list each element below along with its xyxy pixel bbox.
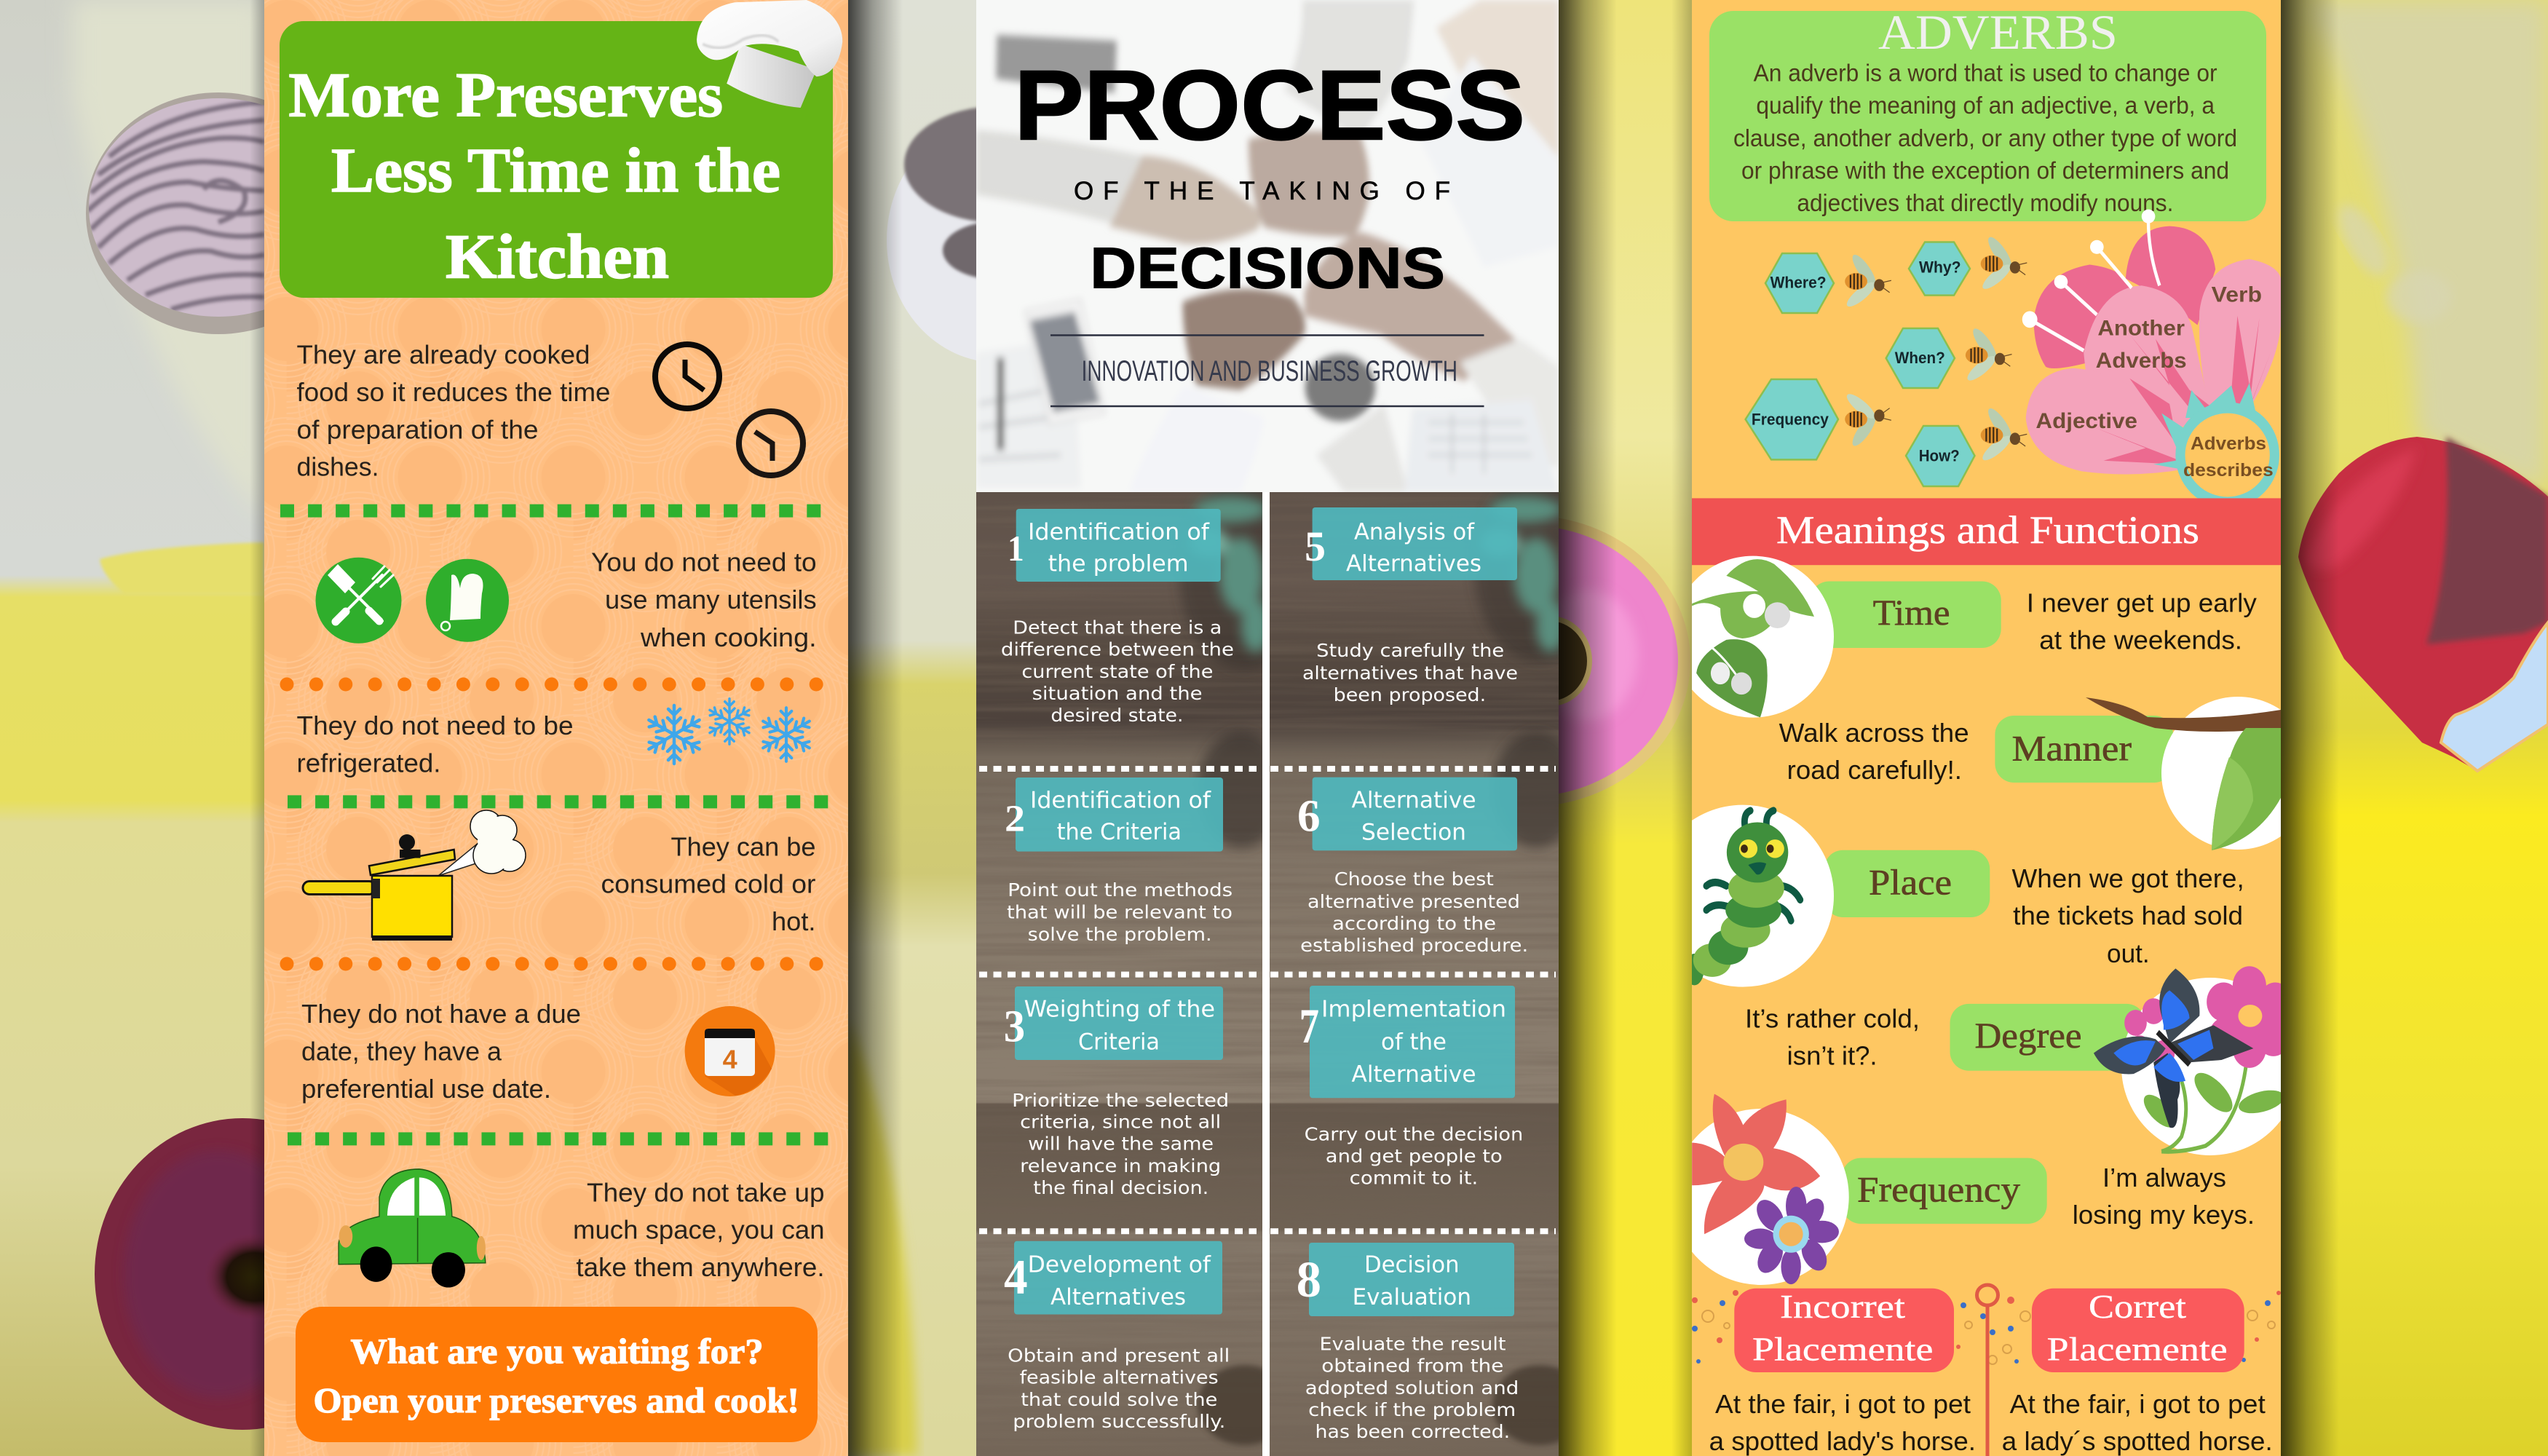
function: place: When we got there, bbox=[2012, 863, 2244, 893]
title block: DECISIONS bbox=[1090, 235, 1445, 300]
heading box: More Preserves bbox=[288, 59, 723, 130]
step 8: Evaluation bbox=[1353, 1284, 1471, 1310]
step 8 bbox=[1297, 1243, 1519, 1442]
red heart sweet bbox=[2298, 437, 2548, 771]
hexagon: frequency bbox=[1746, 379, 1838, 459]
step 2: that will be relevant to bbox=[1007, 901, 1233, 923]
step 6 bbox=[1297, 778, 1528, 956]
flower diagram: Adverbs bbox=[2191, 433, 2266, 454]
step 4: feasible alternatives bbox=[1020, 1367, 1219, 1388]
text: refrigerated bbox=[297, 711, 574, 778]
step 2: the Criteria bbox=[1057, 819, 1182, 845]
wood background column right bbox=[1270, 473, 1605, 1456]
function: frequency bbox=[1673, 1094, 2255, 1285]
step 3: 3 bbox=[1004, 1002, 1025, 1051]
wood background column left bbox=[976, 480, 1310, 1456]
incorrect placement heading: Incorret bbox=[1780, 1288, 1905, 1325]
step 8: obtained from the bbox=[1321, 1356, 1503, 1377]
heading box bbox=[280, 21, 833, 298]
step 5: Alternatives bbox=[1346, 550, 1481, 577]
call to action bbox=[296, 1307, 818, 1442]
function: place: the tickets had sold bbox=[2013, 901, 2243, 930]
section band bbox=[1692, 498, 2281, 565]
call to action: Open your preserves and cook! bbox=[313, 1380, 799, 1420]
text: take up space bbox=[573, 1178, 825, 1282]
step 5 bbox=[1302, 507, 1518, 705]
incorrect placement heading bbox=[1734, 1288, 1954, 1372]
icon: chef hat bbox=[697, 0, 842, 108]
step 2: solve the problem. bbox=[1028, 924, 1212, 945]
step 7: of the bbox=[1381, 1029, 1447, 1055]
function: degree: Degree bbox=[1974, 1015, 2082, 1056]
step 3 bbox=[1004, 986, 1229, 1198]
step 1: desired state. bbox=[1051, 705, 1183, 726]
text: utensils bbox=[591, 547, 817, 652]
step 2: Point out the methods bbox=[1008, 879, 1233, 901]
step 6: alternative presented bbox=[1307, 891, 1520, 912]
example: correct bbox=[2002, 1389, 2273, 1456]
step 2 bbox=[1005, 778, 1233, 945]
divider pole bbox=[1977, 1285, 1998, 1456]
step 6: Alternative bbox=[1351, 788, 1476, 814]
step 5: 5 bbox=[1305, 523, 1326, 570]
step 8: check if the problem bbox=[1308, 1399, 1516, 1420]
cupcake frosting bbox=[86, 92, 351, 334]
text: already cooked: dishes. bbox=[297, 452, 379, 482]
text: utensils: when cooking. bbox=[640, 622, 817, 652]
icon: oven mitt bbox=[426, 559, 509, 642]
function: place bbox=[1652, 805, 2244, 987]
icon: green car bbox=[339, 1169, 486, 1288]
step 4: Obtain and present all bbox=[1008, 1345, 1230, 1366]
panel: more preserves bbox=[264, 0, 848, 1456]
text: due date: date, they have a bbox=[301, 1037, 502, 1067]
step 5: Study carefully the bbox=[1316, 640, 1504, 661]
step 8: adopted solution and bbox=[1305, 1377, 1519, 1398]
text: due date: preferential use date. bbox=[301, 1074, 551, 1104]
function: time: I never get up early bbox=[2027, 588, 2257, 618]
flower diagram: Another bbox=[2097, 316, 2185, 341]
example: correct: At the fair, i got to pet bbox=[2010, 1389, 2266, 1419]
text: consumed cold or hot bbox=[601, 831, 816, 936]
plate and dark cupcake in second gap bbox=[887, 106, 1108, 363]
icon: utensils bbox=[316, 558, 402, 644]
heading box: Kitchen bbox=[446, 221, 669, 291]
definition box: An adverb is a word that is used to change or bbox=[1754, 60, 2217, 87]
step 1: situation and the bbox=[1032, 683, 1203, 704]
text: utensils: You do not need to bbox=[591, 547, 817, 577]
hexagon: frequency: Frequency bbox=[1752, 411, 1829, 429]
text: refrigerated: They do not need to be bbox=[297, 711, 574, 740]
icon: cooking pot with steam bbox=[303, 810, 526, 941]
step 6: 6 bbox=[1297, 792, 1321, 842]
flower diagram: Adverbs bbox=[2096, 349, 2187, 373]
step 2: Identification of bbox=[1030, 788, 1211, 814]
function: place: Place bbox=[1869, 861, 1952, 902]
step 3: criteria, since not all bbox=[1020, 1112, 1221, 1133]
step 4: Development of bbox=[1028, 1251, 1211, 1278]
step 4 bbox=[1004, 1241, 1230, 1432]
step 7: commit to it. bbox=[1350, 1167, 1478, 1188]
step 5: been proposed. bbox=[1334, 684, 1486, 705]
icon: clock two bbox=[739, 411, 803, 475]
step 7: Implementation bbox=[1321, 997, 1506, 1023]
text: refrigerated: refrigerated. bbox=[297, 748, 441, 778]
text: take up space: They do not take up bbox=[587, 1178, 825, 1207]
icon: clock one bbox=[655, 344, 719, 408]
step 5: Analysis of bbox=[1354, 519, 1475, 545]
incorrect placement heading: Placemente bbox=[1752, 1331, 1933, 1368]
correct placement heading: Placemente bbox=[2047, 1331, 2228, 1368]
step 7: Carry out the decision bbox=[1305, 1123, 1523, 1144]
step 1: Identification of bbox=[1028, 519, 1210, 545]
step 3: relevance in making bbox=[1020, 1155, 1221, 1176]
function: degree: It’s rather cold, bbox=[1745, 1003, 1920, 1033]
function: frequency: I’m always bbox=[2102, 1163, 2226, 1192]
step 3: the final decision. bbox=[1033, 1177, 1208, 1198]
correct placement heading bbox=[2032, 1288, 2244, 1372]
function: manner bbox=[1779, 697, 2314, 850]
step 6: Choose the best bbox=[1334, 869, 1494, 890]
step 6: Selection bbox=[1361, 820, 1466, 846]
step 5: alternatives that have bbox=[1302, 662, 1518, 684]
function: manner: Walk across the bbox=[1779, 718, 1969, 748]
pink donut bbox=[1367, 515, 1690, 807]
hexagon: how: How? bbox=[1919, 446, 1960, 464]
dark donut bbox=[95, 1118, 390, 1430]
definition box: ADVERBS bbox=[1878, 4, 2118, 60]
title block bbox=[1014, 50, 1525, 406]
step 8: 8 bbox=[1297, 1252, 1321, 1308]
text: already cooked: of preparation of the bbox=[297, 415, 539, 445]
icon: bees bbox=[1844, 234, 2027, 464]
function: frequency: losing my keys. bbox=[2073, 1200, 2255, 1230]
step 3: Weighting of the bbox=[1024, 997, 1215, 1023]
hexagon: why bbox=[1909, 242, 1970, 296]
function: time: Time bbox=[1873, 592, 1950, 633]
icon: calendar bbox=[685, 1006, 775, 1096]
text: take up space: much space, you can bbox=[573, 1214, 825, 1245]
step 4: 4 bbox=[1004, 1249, 1028, 1305]
icon: snowflakes bbox=[646, 699, 812, 764]
step 1: current state of the bbox=[1021, 661, 1213, 682]
step 6: according to the bbox=[1332, 913, 1496, 934]
definition box: clause, another adverb, or any other type of word bbox=[1733, 124, 2237, 151]
text: consumed cold or hot: hot. bbox=[772, 906, 815, 936]
flower diagram: Adjective bbox=[2035, 409, 2137, 433]
example: correct: a lady´s spotted horse. bbox=[2002, 1426, 2273, 1456]
example: incorrect: At the fair, i got to pet bbox=[1715, 1389, 1971, 1419]
step 1 bbox=[1001, 509, 1234, 726]
flower diagram bbox=[2022, 210, 2281, 502]
function: place: out. bbox=[2107, 938, 2150, 968]
hexagon: when: When? bbox=[1895, 349, 1945, 367]
function: time bbox=[1672, 556, 2257, 718]
step 8: Evaluate the result bbox=[1319, 1334, 1506, 1355]
step 4: problem successfully. bbox=[1013, 1411, 1225, 1432]
hexagon: when bbox=[1886, 328, 1955, 388]
hexagon: where: Where? bbox=[1770, 273, 1827, 291]
step 3: will have the same bbox=[1028, 1133, 1214, 1155]
example: incorrect bbox=[1709, 1389, 1976, 1456]
definition box: qualify the meaning of an adjective, a verb, a bbox=[1756, 92, 2215, 119]
step 8: Decision bbox=[1364, 1251, 1460, 1278]
title block: INNOVATION AND BUSINESS GROWTH bbox=[1082, 355, 1457, 387]
step 1: 1 bbox=[1008, 528, 1024, 569]
step 3: Prioritize the selected bbox=[1012, 1090, 1229, 1111]
step 7: 7 bbox=[1299, 998, 1319, 1053]
function: manner: road carefully!. bbox=[1787, 755, 1962, 785]
text: consumed cold or hot: They can be bbox=[671, 831, 815, 861]
panel: process of decisions bbox=[976, 0, 1605, 1456]
text: utensils: use many utensils bbox=[605, 585, 817, 614]
text: already cooked: They are already cooked bbox=[297, 339, 590, 369]
text: already cooked: food so it reduces the time bbox=[297, 377, 610, 407]
text: due date: They do not have a due bbox=[301, 999, 581, 1029]
step 7: Alternative bbox=[1351, 1061, 1476, 1088]
photo: fist bump over desk bbox=[976, 0, 1559, 492]
function: degree: isn’t it?. bbox=[1787, 1040, 1878, 1070]
step 2: 2 bbox=[1005, 799, 1025, 840]
flower diagram: describes bbox=[2183, 460, 2274, 480]
step 7 bbox=[1299, 986, 1523, 1188]
panel: adverbs bbox=[1652, 0, 2314, 1456]
definition box bbox=[1709, 4, 2266, 221]
call to action: What are you waiting for? bbox=[351, 1331, 763, 1371]
hexagon: why: Why? bbox=[1919, 258, 1961, 276]
step 4: that could solve the bbox=[1021, 1389, 1217, 1410]
step 1: Detect that there is a bbox=[1013, 617, 1222, 638]
title block: OF THE TAKING OF bbox=[1074, 177, 1450, 205]
section band: Meanings and Functions bbox=[1776, 508, 2199, 552]
step 4: Alternatives bbox=[1051, 1284, 1186, 1310]
function: time: at the weekends. bbox=[2039, 625, 2242, 655]
correct placement heading: Corret bbox=[2089, 1288, 2186, 1325]
flower diagram: Verb bbox=[2212, 283, 2262, 307]
step 7: and get people to bbox=[1326, 1145, 1503, 1166]
step 1: difference between the bbox=[1001, 639, 1234, 660]
example: incorrect: a spotted lady's horse. bbox=[1709, 1426, 1976, 1456]
function: frequency: Frequency bbox=[1857, 1169, 2020, 1210]
function: degree bbox=[1745, 966, 2299, 1155]
step 8: has been corrected. bbox=[1315, 1421, 1510, 1442]
icon: calendar: 4 bbox=[723, 1044, 737, 1075]
hexagon: how bbox=[1906, 426, 1974, 486]
step 1: the problem bbox=[1048, 550, 1189, 577]
text: due date bbox=[301, 999, 581, 1104]
title block: PROCESS bbox=[1014, 50, 1525, 160]
definition box: adjectives that directly modify nouns. bbox=[1797, 189, 2173, 216]
step 3: Criteria bbox=[1078, 1029, 1160, 1055]
hexagon: where bbox=[1765, 253, 1834, 313]
step 6: established procedure. bbox=[1300, 935, 1528, 956]
definition box: or phrase with the exception of determiners and bbox=[1741, 157, 2229, 184]
heading box: Less Time in the bbox=[331, 135, 780, 205]
text: take up space: take them anywhere. bbox=[576, 1252, 825, 1282]
text: consumed cold or hot: consumed cold or bbox=[601, 869, 816, 898]
text: already cooked bbox=[297, 339, 610, 482]
function: manner: Manner bbox=[2012, 728, 2132, 769]
confetti decoration bbox=[1692, 1290, 2281, 1364]
